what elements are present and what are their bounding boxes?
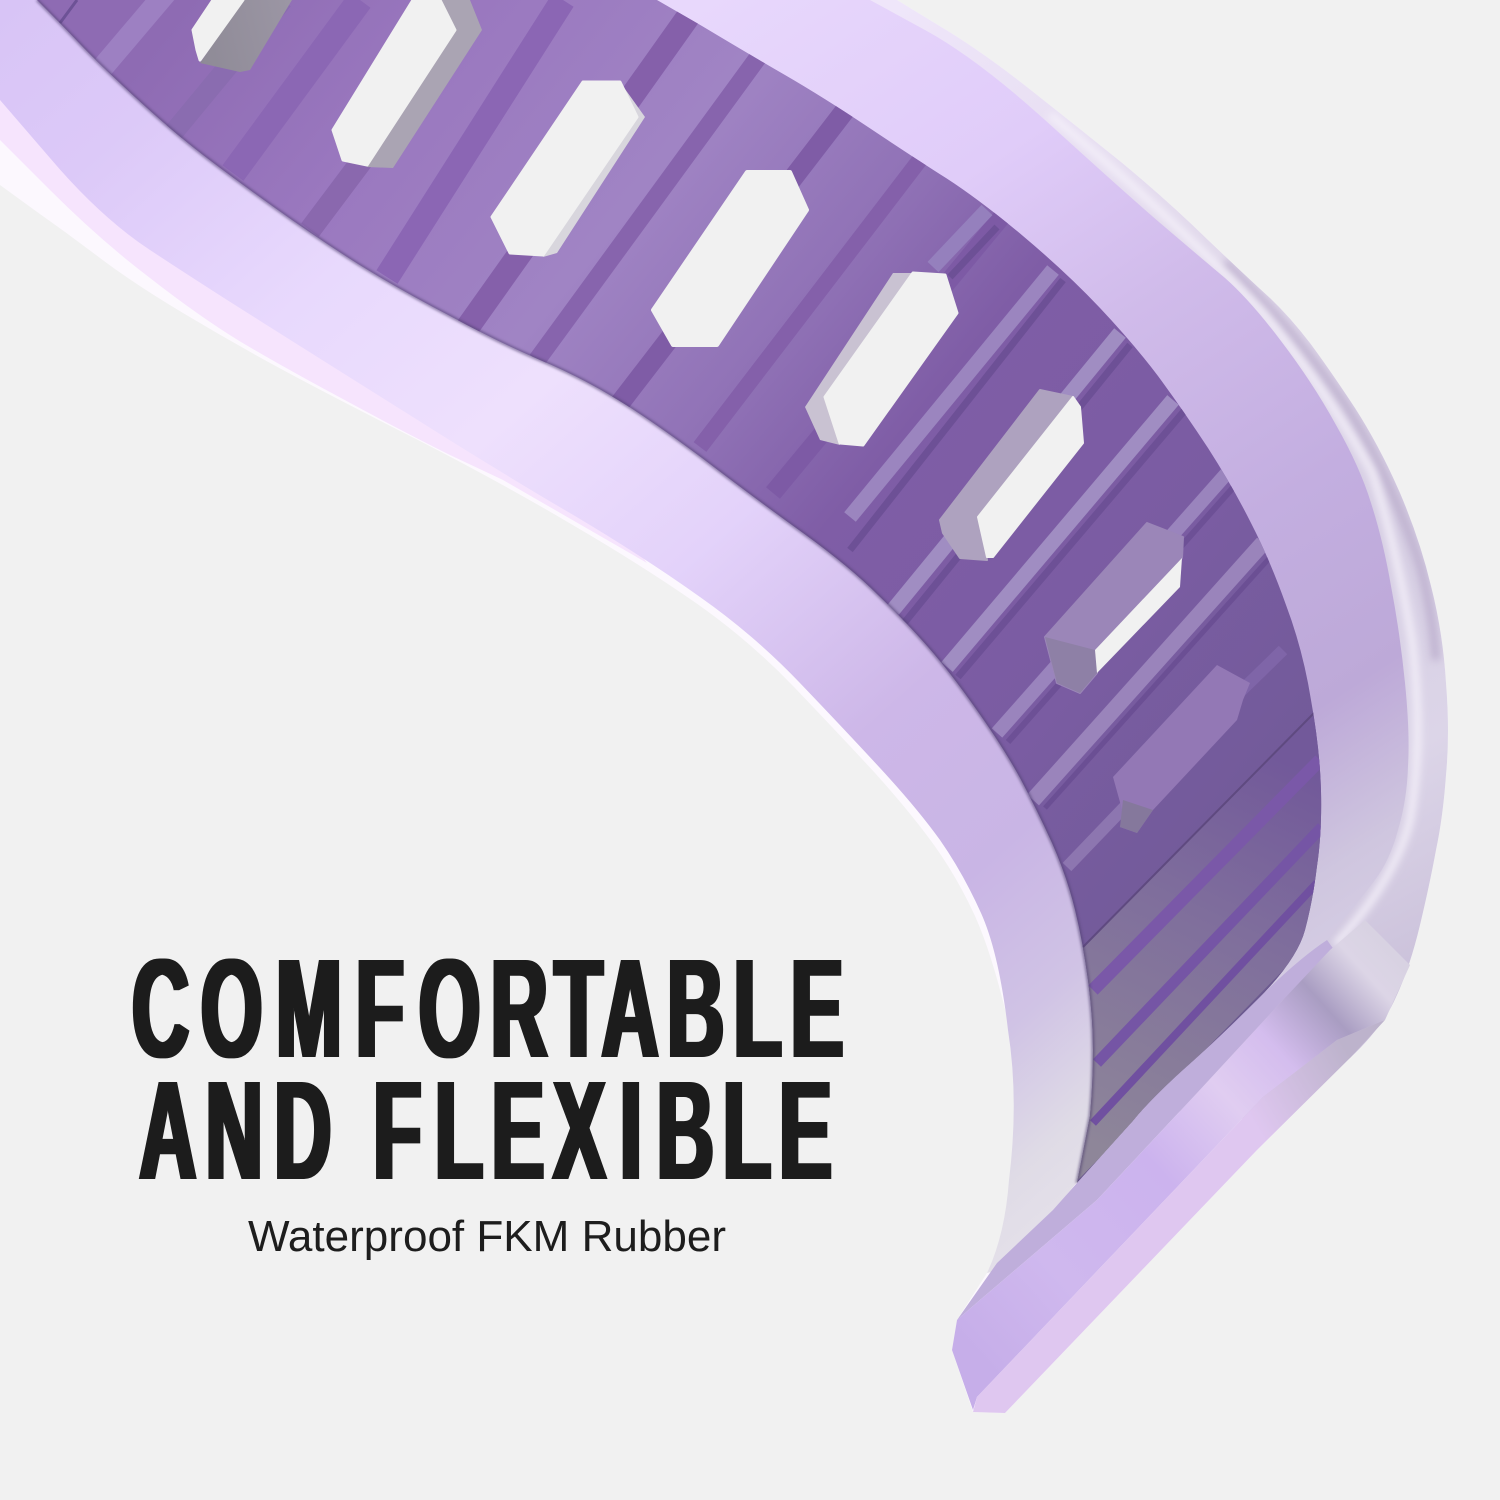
hole 1 [193,0,292,72]
headline [132,931,843,1210]
strap buckle tip [952,920,1410,1413]
hole 4 [653,172,807,345]
panel edge shadow [37,0,1093,1183]
hole 8 [1113,665,1250,833]
soft shading on outer band [1050,115,1436,945]
lower rim surface [0,0,1200,1273]
upper rim surface [657,0,1409,1100]
subtitle: Waterproof FKM Rubber [248,1212,726,1261]
hole 5 [805,273,957,445]
hole 2 [333,0,482,168]
hole 7 [1045,523,1183,693]
pink lower edge of strap [0,100,647,563]
hole 6 [940,390,1083,560]
ribs: upper strap section [60,0,1020,493]
ribs: light stripes with dark edges [850,210,1283,867]
tip main surface [952,920,1410,1410]
outer band on the right side [800,0,1448,1120]
headline line 1: COMFORTABLE [132,931,843,1088]
inner purple panel with ribs [37,0,1322,1183]
ribs: lower grey section [1077,712,1322,1182]
headline line 2: AND FLEXIBLE [139,1053,832,1210]
hole 3 [492,82,645,257]
panel base [37,0,1322,1183]
strap holes [193,0,1250,833]
tip upper edge band [957,940,1345,1320]
tip lower light strip [973,1020,1385,1413]
